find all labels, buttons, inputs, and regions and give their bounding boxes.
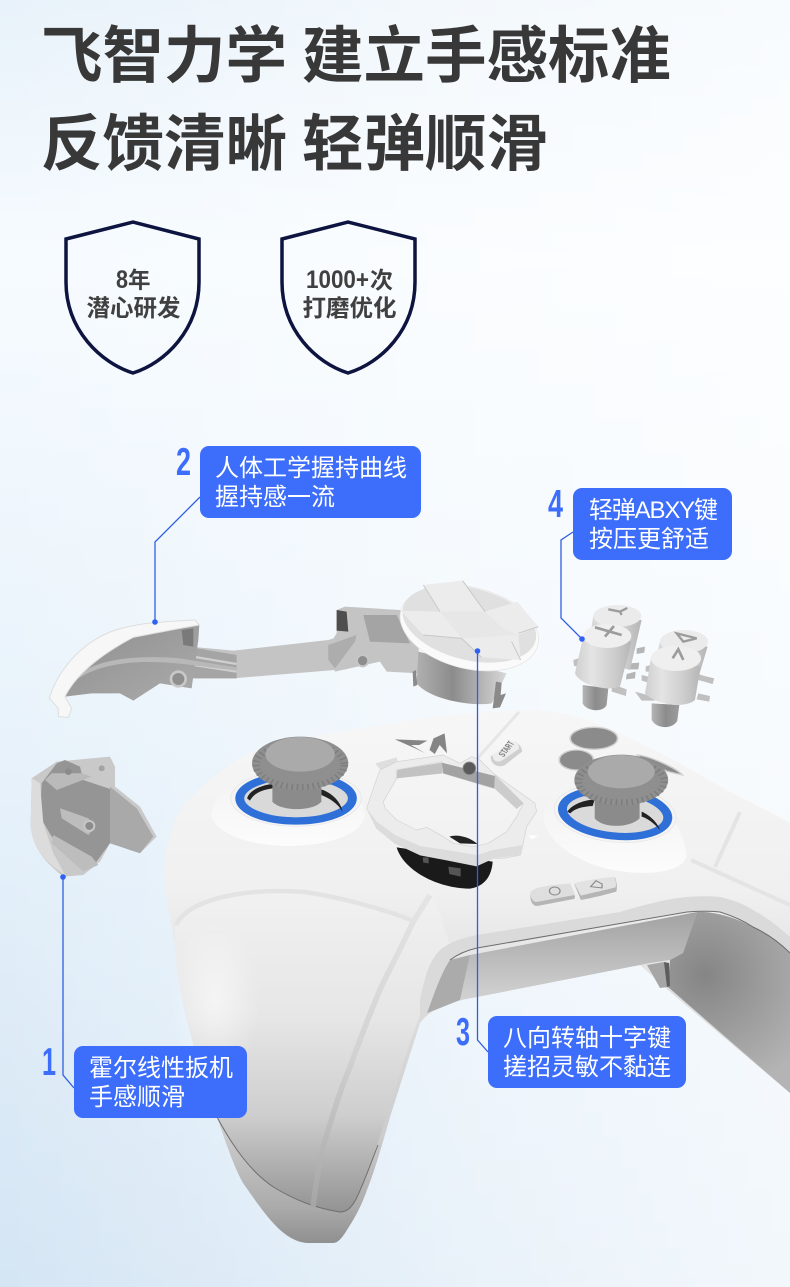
left stick well xyxy=(211,770,365,846)
dpad socket xyxy=(397,836,493,889)
callout 4: ABXY: 轻弹ABXY键 xyxy=(589,497,718,524)
right textured grip xyxy=(668,912,790,1093)
badge: 1000+次打磨优化: 打磨优化 xyxy=(302,295,396,321)
callout 4: ABXY: 按压更舒适 xyxy=(589,526,709,553)
callout 2: ergonomic grip: 握持感一流 xyxy=(215,484,335,511)
badge: 8年潜心研发: 年 xyxy=(128,268,151,293)
badge: 8年潜心研发 xyxy=(66,222,199,373)
select button xyxy=(375,757,399,770)
home buttons xyxy=(530,877,617,906)
badge: 8年潜心研发: 潜心研发 xyxy=(86,295,180,321)
callout 2: ergonomic grip xyxy=(152,441,421,625)
badge: 1000+次打磨优化: 次 xyxy=(370,267,393,293)
callout 3: dpad: 搓招灵敏不黏连 xyxy=(503,1054,671,1081)
title: 飞智力学 xyxy=(41,22,287,91)
rear trigger nub xyxy=(647,962,670,988)
title: 轻弹顺滑 xyxy=(302,110,548,179)
face button holes xyxy=(559,727,682,775)
callout 3: dpad: 八向转轴十字键 xyxy=(503,1025,671,1052)
callout 1: hall trigger: 1 xyxy=(42,1041,56,1084)
grip rim xyxy=(420,896,790,1023)
dpad socket and mounting ring xyxy=(367,755,538,889)
part: dpad xyxy=(391,571,548,708)
start button: START xyxy=(496,739,517,758)
callout 4: ABXY: 4 xyxy=(548,483,563,526)
right stick well xyxy=(544,778,687,873)
callout 3: dpad xyxy=(456,648,686,1088)
button Y xyxy=(587,605,645,679)
panel outline xyxy=(217,1117,378,1212)
callout 2: ergonomic grip: 人体工学握持曲线 xyxy=(215,455,407,482)
callout 1: hall trigger: 手感顺滑 xyxy=(89,1084,185,1111)
logo xyxy=(395,733,447,754)
badge: 1000+次打磨优化: 1000+ xyxy=(306,266,369,294)
left textured grip xyxy=(427,955,470,1013)
badge: 1000+次打磨优化 xyxy=(282,222,415,373)
button X xyxy=(573,624,632,710)
title: 反馈清晰 xyxy=(41,110,287,179)
right thumbstick xyxy=(574,755,668,826)
button B xyxy=(653,630,714,684)
callout 1: hall trigger: 霍尔线性扳机 xyxy=(89,1055,233,1082)
callout 4: ABXY xyxy=(548,483,732,642)
callout 3: dpad: 3 xyxy=(456,1011,470,1054)
controller top details xyxy=(211,727,687,906)
controller body xyxy=(164,710,790,1243)
title: 建立手感标准 xyxy=(302,22,671,91)
callout 2: ergonomic grip: 2 xyxy=(176,441,191,484)
lower shaded panel xyxy=(175,890,450,1212)
part: ABXY buttons xyxy=(573,605,714,727)
left thumbstick xyxy=(252,737,348,809)
grip dark line xyxy=(450,911,790,960)
inner grip panel xyxy=(460,912,697,1000)
part: ergonomic grip shell xyxy=(49,607,420,717)
button A xyxy=(635,646,714,727)
body seams xyxy=(176,712,790,1207)
badge: 8年潜心研发: 8 xyxy=(116,266,128,294)
callout 1: hall trigger xyxy=(42,874,247,1118)
start button xyxy=(491,739,522,766)
title xyxy=(41,22,671,179)
part: left trigger xyxy=(31,757,157,877)
panel highlight xyxy=(170,920,260,1080)
mounting ring xyxy=(367,755,538,866)
